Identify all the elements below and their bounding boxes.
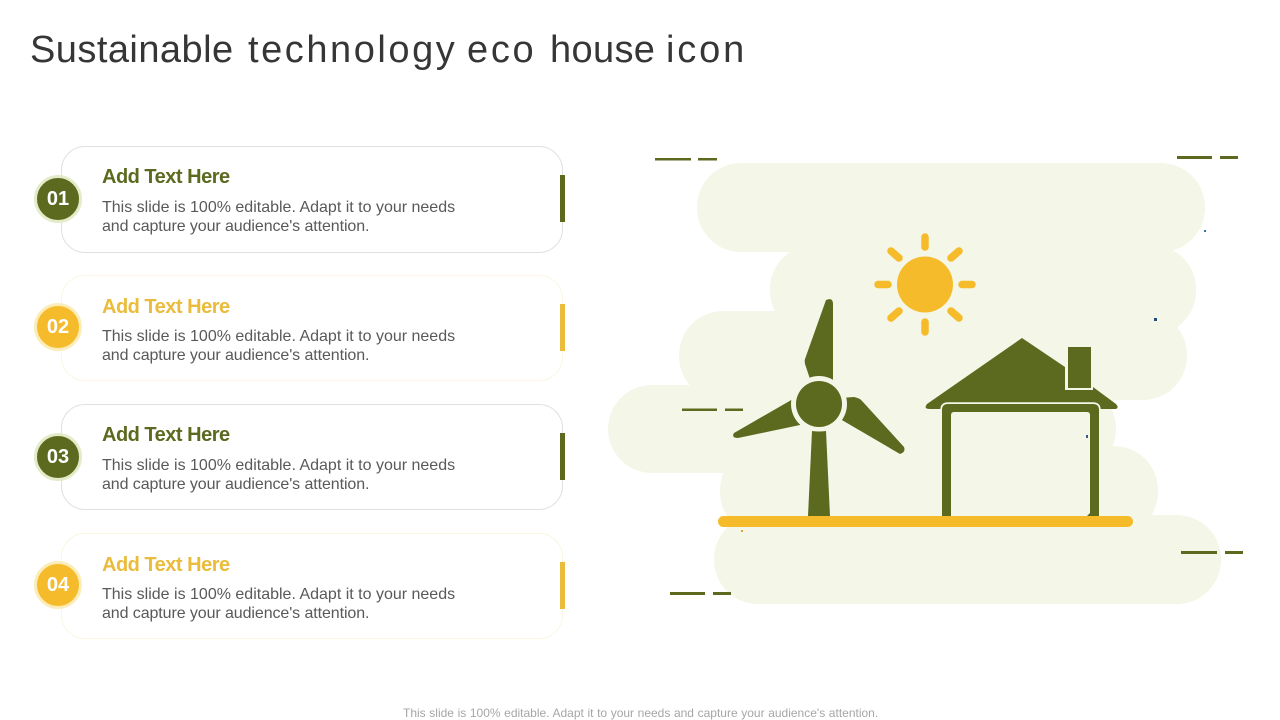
body text 01: This slide is 100% editable. Adapt it to your needs	[102, 199, 455, 216]
number badge 02	[34, 303, 82, 351]
body text 04: This slide is 100% editable. Adapt it to your needs	[102, 586, 455, 603]
title: icon	[666, 29, 747, 71]
body text 03	[102, 457, 455, 493]
number badge 03: 03	[47, 446, 69, 468]
title	[30, 29, 747, 71]
decorative dashes	[655, 156, 1243, 595]
icon: house	[926, 338, 1118, 516]
heading 04: Add Text Here	[102, 554, 230, 576]
card outline 01	[61, 146, 563, 253]
heading 02: Add Text Here	[102, 296, 230, 318]
body text 02	[102, 328, 455, 364]
accent bar 04	[560, 562, 565, 609]
footer note: This slide is 100% editable. Adapt it to your needs and capture your audience's attention.	[403, 706, 878, 720]
card outline 02	[61, 275, 563, 381]
panel: item 03	[34, 404, 565, 510]
card outline 04	[61, 533, 563, 639]
icon: wind turbine	[733, 299, 904, 516]
number badge 01: 01	[47, 188, 69, 210]
body text 02: This slide is 100% editable. Adapt it to your needs	[102, 328, 455, 345]
accent bar 01	[560, 175, 565, 222]
panel: item 02	[34, 275, 565, 381]
body text 03: and capture your audience's attention.	[102, 476, 369, 493]
accent bar 03	[560, 433, 565, 480]
ground line	[718, 516, 1133, 527]
title: technology	[248, 29, 457, 71]
heading 03: Add Text Here	[102, 424, 230, 446]
title: Sustainable	[30, 29, 234, 71]
panel: item 01	[34, 146, 565, 253]
heading 01: Add Text Here	[102, 166, 230, 188]
icon: sun	[878, 237, 972, 332]
number badge 02: 02	[47, 316, 69, 338]
accent bar 02	[560, 304, 565, 351]
body text 01: and capture your audience's attention.	[102, 218, 369, 235]
number badge 03	[34, 433, 82, 481]
body text 02: and capture your audience's attention.	[102, 347, 369, 364]
number badge 04	[34, 561, 82, 609]
body text 03: This slide is 100% editable. Adapt it to your needs	[102, 457, 455, 474]
body text 04: and capture your audience's attention.	[102, 605, 369, 622]
title: house	[550, 29, 655, 71]
number badge 04: 04	[47, 574, 69, 596]
small specks	[741, 230, 1206, 532]
background cloud bands	[608, 163, 1221, 604]
number badge 01	[34, 175, 82, 223]
body text 01	[102, 199, 455, 235]
panel: item 04	[34, 533, 565, 639]
body text 04	[102, 586, 455, 622]
title: eco	[467, 29, 536, 71]
card outline 03	[61, 404, 563, 510]
